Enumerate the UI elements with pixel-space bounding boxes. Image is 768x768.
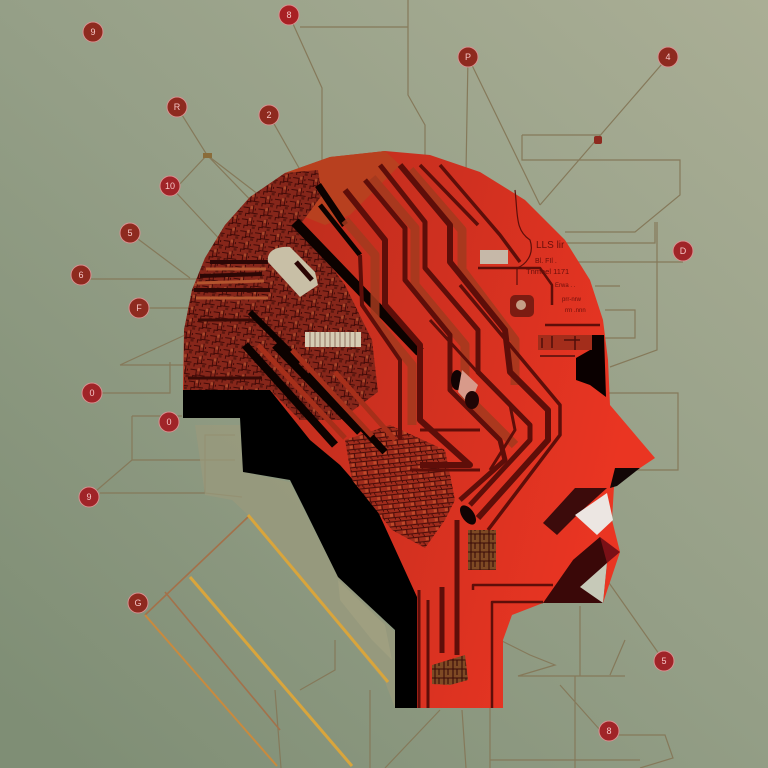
badge 9 top left [83, 22, 103, 42]
badge 5 right [654, 651, 674, 671]
badge 5 left: 5 [127, 228, 133, 238]
neck and collar [145, 425, 395, 766]
badge 0 lower [159, 412, 179, 432]
tiny circuit label text: LLS lir [536, 240, 565, 251]
white pill component [268, 247, 318, 297]
black circuit traces: left [245, 185, 420, 452]
badge 9 lower: 9 [86, 492, 92, 502]
circuit connector lines [81, 0, 683, 768]
badge 2 [259, 105, 279, 125]
badge 4: 4 [665, 52, 671, 62]
horizontal bands: left head [188, 262, 270, 378]
mouth and lips [543, 468, 640, 603]
badge 5 left [120, 223, 140, 243]
chip block: lower neck [468, 530, 496, 570]
black window: right temple [576, 335, 606, 397]
tiny circuit label text: rrn .nnn [565, 308, 586, 314]
badge 9 lower [79, 487, 99, 507]
dark capacitor: centre [451, 370, 479, 527]
white rectangle component [480, 250, 508, 264]
dark red traces: central flow [345, 165, 600, 708]
badge 0 left: 0 [89, 388, 95, 398]
badge P [458, 47, 478, 67]
badge 5 right: 5 [661, 656, 667, 666]
badge R: R [174, 102, 181, 112]
badge R [167, 97, 187, 117]
tiny circuit label text [526, 240, 586, 314]
tiny circuit label text: prr-nrw [562, 297, 582, 303]
small node junction [203, 153, 212, 158]
dense circuit region: lower centre [345, 425, 455, 548]
badge 6: 6 [78, 270, 84, 280]
black shadow silhouette [183, 360, 425, 708]
badge G: G [134, 598, 142, 608]
badge 8 top [279, 5, 299, 25]
dense circuit region: upper left [184, 170, 378, 420]
brown bands along central flow [345, 170, 515, 445]
dome rim circuit band [285, 151, 400, 225]
tiny circuit label text: Tnmeel 1171 [526, 267, 569, 276]
badge G [128, 593, 148, 613]
badge 10 [160, 176, 180, 196]
red stripes between black traces [258, 345, 395, 440]
badge 9 top left: 9 [90, 27, 96, 37]
chip block: neck base [432, 655, 468, 685]
badge F: F [136, 303, 142, 313]
badge 8 top: 8 [286, 10, 292, 20]
badge 6 [71, 265, 91, 285]
badge D: D [680, 246, 687, 256]
badge 0 left [82, 383, 102, 403]
tiny circuit label text: Erwa . . [555, 283, 576, 289]
circuit chip row: right head [538, 335, 592, 356]
tiny circuit label text: Bl. FIl . [535, 258, 557, 265]
component: round socket [510, 295, 534, 317]
badge P: P [465, 52, 471, 62]
badge 4 [658, 47, 678, 67]
badge F [129, 298, 149, 318]
badge D [673, 241, 693, 261]
badge 10: 10 [165, 181, 175, 191]
badge 8 bottom: 8 [606, 726, 612, 736]
badge 0 lower: 0 [166, 417, 172, 427]
small node on line [594, 136, 602, 144]
barcode component [305, 332, 361, 347]
badge 2: 2 [266, 110, 272, 120]
red head [183, 151, 655, 708]
badge 8 bottom [599, 721, 619, 741]
